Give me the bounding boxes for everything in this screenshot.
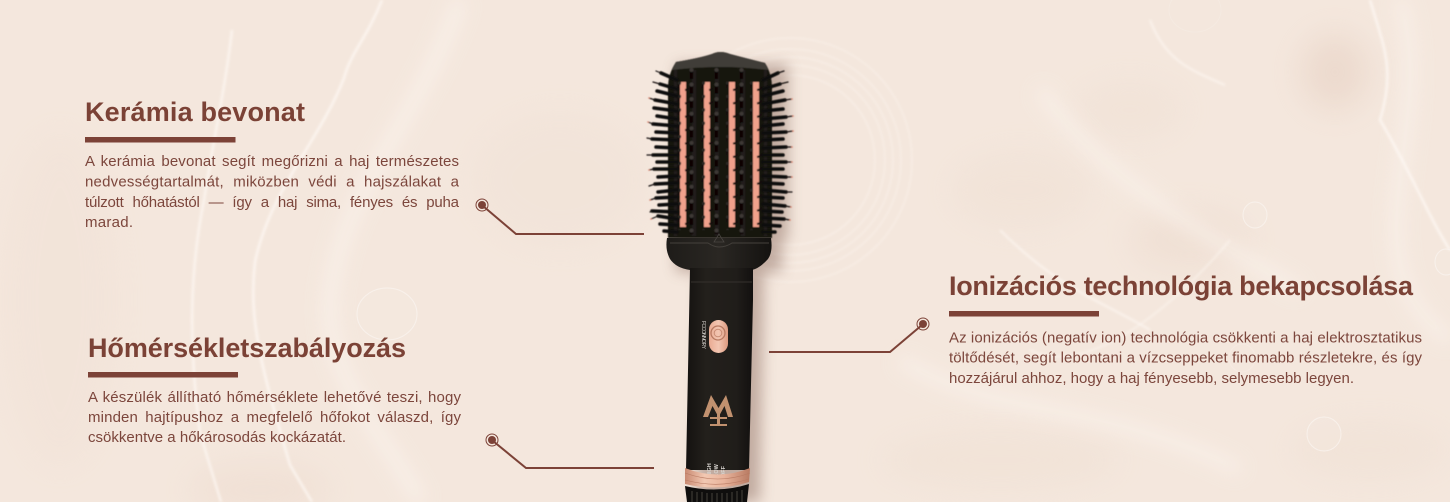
- handle speed labels: OFF: [721, 465, 727, 477]
- text block: temperature description: A készülék állítható hőmérséklete lehetővé teszi, hogy: [88, 389, 462, 406]
- text block: ionization description: Az ionizációs (negatív ion) technológia csökkenti a haj elektrosztatikus: [949, 330, 1422, 346]
- text block: temperature description: minden hajtípushoz a megfelelő hőfokot válaszd, így: [88, 409, 462, 426]
- callout connector: Kerámia bevonat: [476, 199, 644, 234]
- pink heating strips: [680, 82, 759, 227]
- handle brand label: FCCONNORY: [700, 321, 706, 350]
- handle speed labels: [707, 463, 727, 477]
- heading underline: [88, 372, 238, 378]
- text block: ionization description: töltődését, segít lebontani a vízcseppeket finomabb részletekre, és így: [949, 350, 1422, 366]
- collar: [666, 234, 772, 270]
- callout connector: Hőmérsékletszabályozás: [486, 434, 654, 468]
- heading underline: [85, 137, 236, 142]
- hair brush product: [647, 52, 793, 502]
- power switch: [709, 320, 728, 353]
- panel: Ionizációs technológia bekapcsolása: [949, 271, 1422, 387]
- icon: logo monogram: [703, 395, 733, 426]
- text block: ionization description: [949, 330, 1422, 387]
- text block: ceramic coating description: A kerámia bevonat segít megőrizni a haj természetes: [85, 153, 459, 170]
- handle speed labels: HIGH: [707, 463, 713, 477]
- handle: [686, 268, 753, 470]
- brush shadow: [676, 64, 788, 502]
- heading: Ionizációs technológia bekapcsolása: Ionizációs technológia bekapcsolása: [949, 271, 1414, 301]
- panel: Hőmérsékletszabályozás: [88, 333, 462, 446]
- copper ring: [685, 468, 750, 488]
- text block: ceramic coating description: marad.: [85, 214, 133, 231]
- text block: temperature description: [88, 389, 462, 446]
- heading: Hőmérsékletszabályozás: Hőmérsékletszabályozás: [88, 333, 406, 363]
- heading underline: [949, 311, 1099, 316]
- handle speed labels: LOW: [714, 463, 720, 477]
- heading: Kerámia bevonat: Kerámia bevonat: [85, 97, 305, 127]
- brush head: [668, 52, 772, 238]
- text block: ceramic coating description: [85, 153, 460, 231]
- text block: temperature description: csökkentve a hőkárosodás kockázatát.: [88, 429, 346, 446]
- air vent grille: [685, 484, 749, 502]
- bristles: [647, 71, 793, 232]
- panel: Kerámia bevonat: [85, 97, 460, 231]
- callout connector: Ionizációs technológia: [769, 318, 929, 352]
- icon: water bubbles: [357, 0, 1450, 451]
- text block: ionization description: hozzájárul ahhoz, hogy a haj fényesebb, selymesebb legyen.: [949, 370, 1354, 387]
- text block: ceramic coating description: túlzott hőhatástól — így a haj sima, fényes és puha: [85, 194, 460, 211]
- text block: ceramic coating description: nedvességtartalmát, miközben védi a hajszálakat a: [85, 174, 460, 190]
